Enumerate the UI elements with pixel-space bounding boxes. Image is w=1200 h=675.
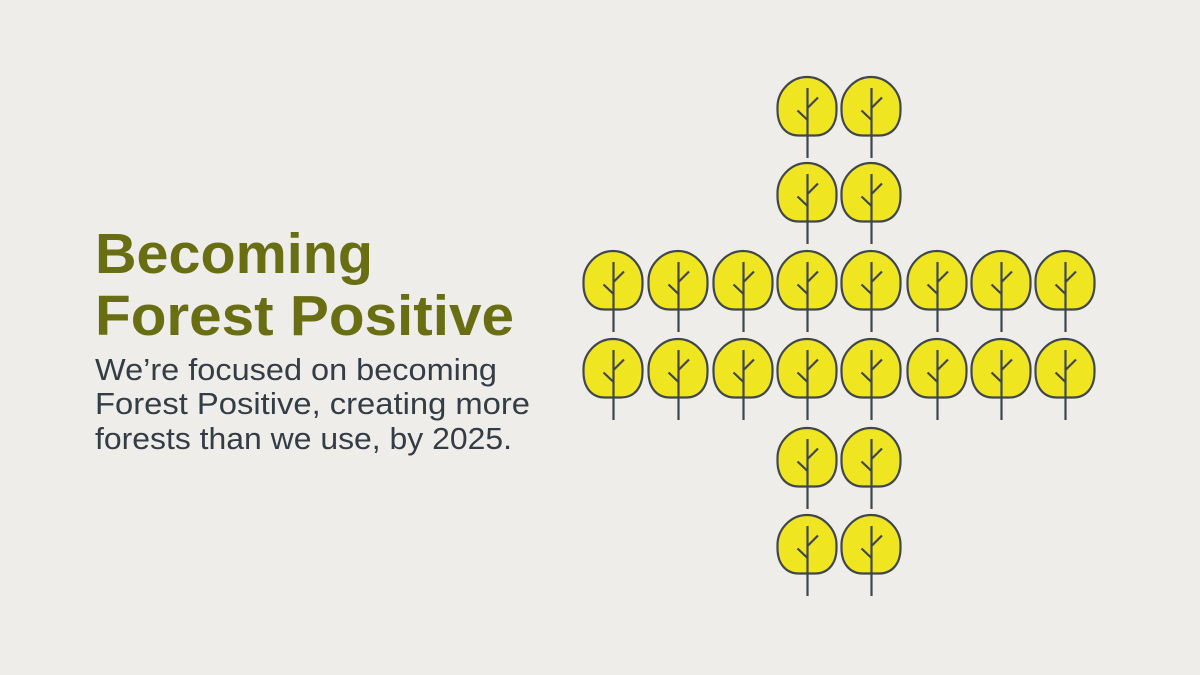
title [95, 222, 514, 348]
tree row 4 [584, 339, 1094, 420]
tree row 1 [778, 77, 900, 158]
description text: We’re focused on becoming [95, 353, 497, 387]
title: Forest Positive [95, 284, 514, 348]
tree pictogram: cross of trees [584, 77, 1094, 596]
tree row 2 [778, 163, 900, 244]
description text: forests than we use, by 2025. [95, 422, 512, 456]
tree row 6 [778, 515, 900, 596]
tree row 5 [778, 428, 900, 509]
description text: Forest Positive, creating more [95, 387, 530, 421]
description text [95, 353, 530, 456]
tree row 3 [584, 251, 1094, 332]
title: Becoming [95, 222, 373, 286]
